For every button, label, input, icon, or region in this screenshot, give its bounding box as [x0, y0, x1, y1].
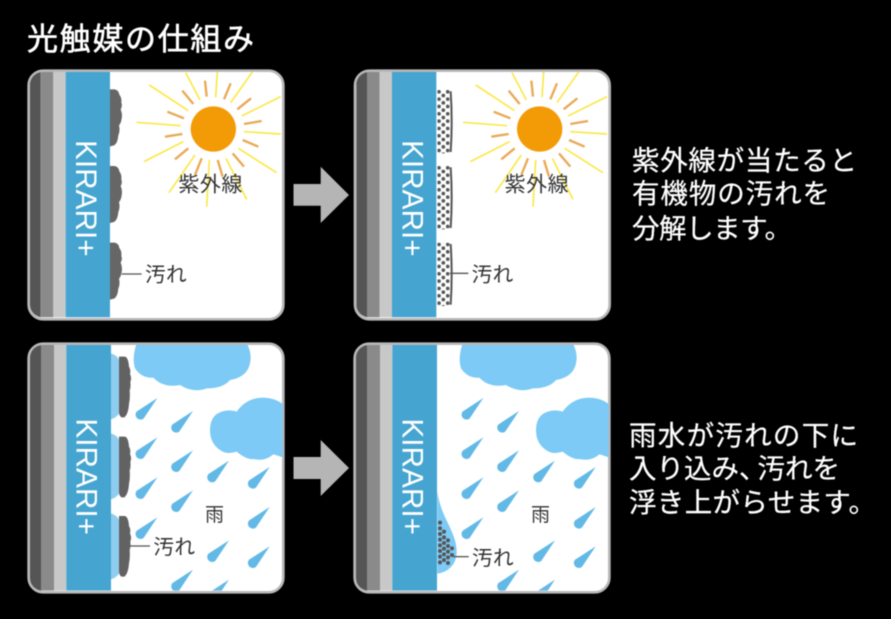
coating layer: KIRARI+: KIRARI+ — [395, 140, 428, 257]
icon: sun with rays — [137, 72, 281, 207]
dirt deposits — [110, 89, 122, 300]
text block: rainwater explanation: 浮き上がらせます。 — [629, 487, 876, 518]
panel: rainwater reaching under dirt — [29, 343, 285, 601]
panel: dirt lifted by rainwater — [355, 343, 611, 601]
text block: rainwater explanation: 雨水が汚れの下に — [629, 420, 858, 451]
text block: ultraviolet explanation: 有機物の汚れを — [632, 178, 830, 209]
label: ultraviolet: 紫外線 — [505, 174, 569, 197]
label: dirt: 汚れ — [472, 547, 514, 570]
arrow: top row — [294, 167, 349, 223]
label: dirt: 汚れ — [153, 536, 195, 559]
label: ultraviolet: 紫外線 — [178, 174, 242, 197]
coating layer: KIRARI+ — [392, 72, 436, 317]
wall layers — [30, 345, 66, 591]
wall layers — [356, 345, 392, 591]
panel: dirt on surface under sunlight — [29, 71, 283, 319]
label: dirt — [453, 547, 514, 570]
label: dirt: 汚れ — [145, 264, 187, 287]
label: dirt: 汚れ — [472, 264, 514, 287]
coating layer: KIRARI+: KIRARI+ — [396, 418, 429, 535]
coating layer: KIRARI+ — [66, 345, 111, 591]
text block: rainwater explanation — [629, 420, 876, 518]
label: dirt — [130, 536, 195, 559]
text block: rainwater explanation: 入り込み、汚れを — [629, 453, 840, 484]
rain clouds and drops — [460, 343, 611, 601]
coating layer: KIRARI+ — [392, 345, 437, 591]
label: dirt — [450, 264, 514, 287]
text block: ultraviolet explanation: 紫外線が当たると — [632, 145, 857, 176]
arrow: bottom row — [294, 440, 349, 496]
water bulge with lifted dirt particles — [437, 492, 457, 574]
water film behind dirt — [111, 353, 120, 579]
label: rain: 雨 — [531, 505, 550, 526]
label: dirt — [122, 264, 187, 287]
text block: ultraviolet explanation — [632, 145, 857, 244]
icon: sun with rays — [463, 72, 607, 207]
label: rain: 雨 — [205, 505, 224, 526]
wall layers — [356, 72, 392, 317]
coating layer: KIRARI+: KIRARI+ — [70, 418, 103, 535]
decomposed dirt particles — [437, 90, 452, 306]
dirt deposits — [119, 357, 131, 577]
panel: dirt decomposed by ultraviolet — [355, 71, 610, 319]
wall layers — [30, 72, 66, 317]
coating layer: KIRARI+ — [66, 72, 110, 317]
title: 光触媒の仕組み — [27, 22, 254, 57]
coating layer: KIRARI+: KIRARI+ — [69, 140, 102, 257]
rain clouds and drops — [134, 343, 285, 601]
text block: ultraviolet explanation: 分解します。 — [632, 213, 792, 244]
